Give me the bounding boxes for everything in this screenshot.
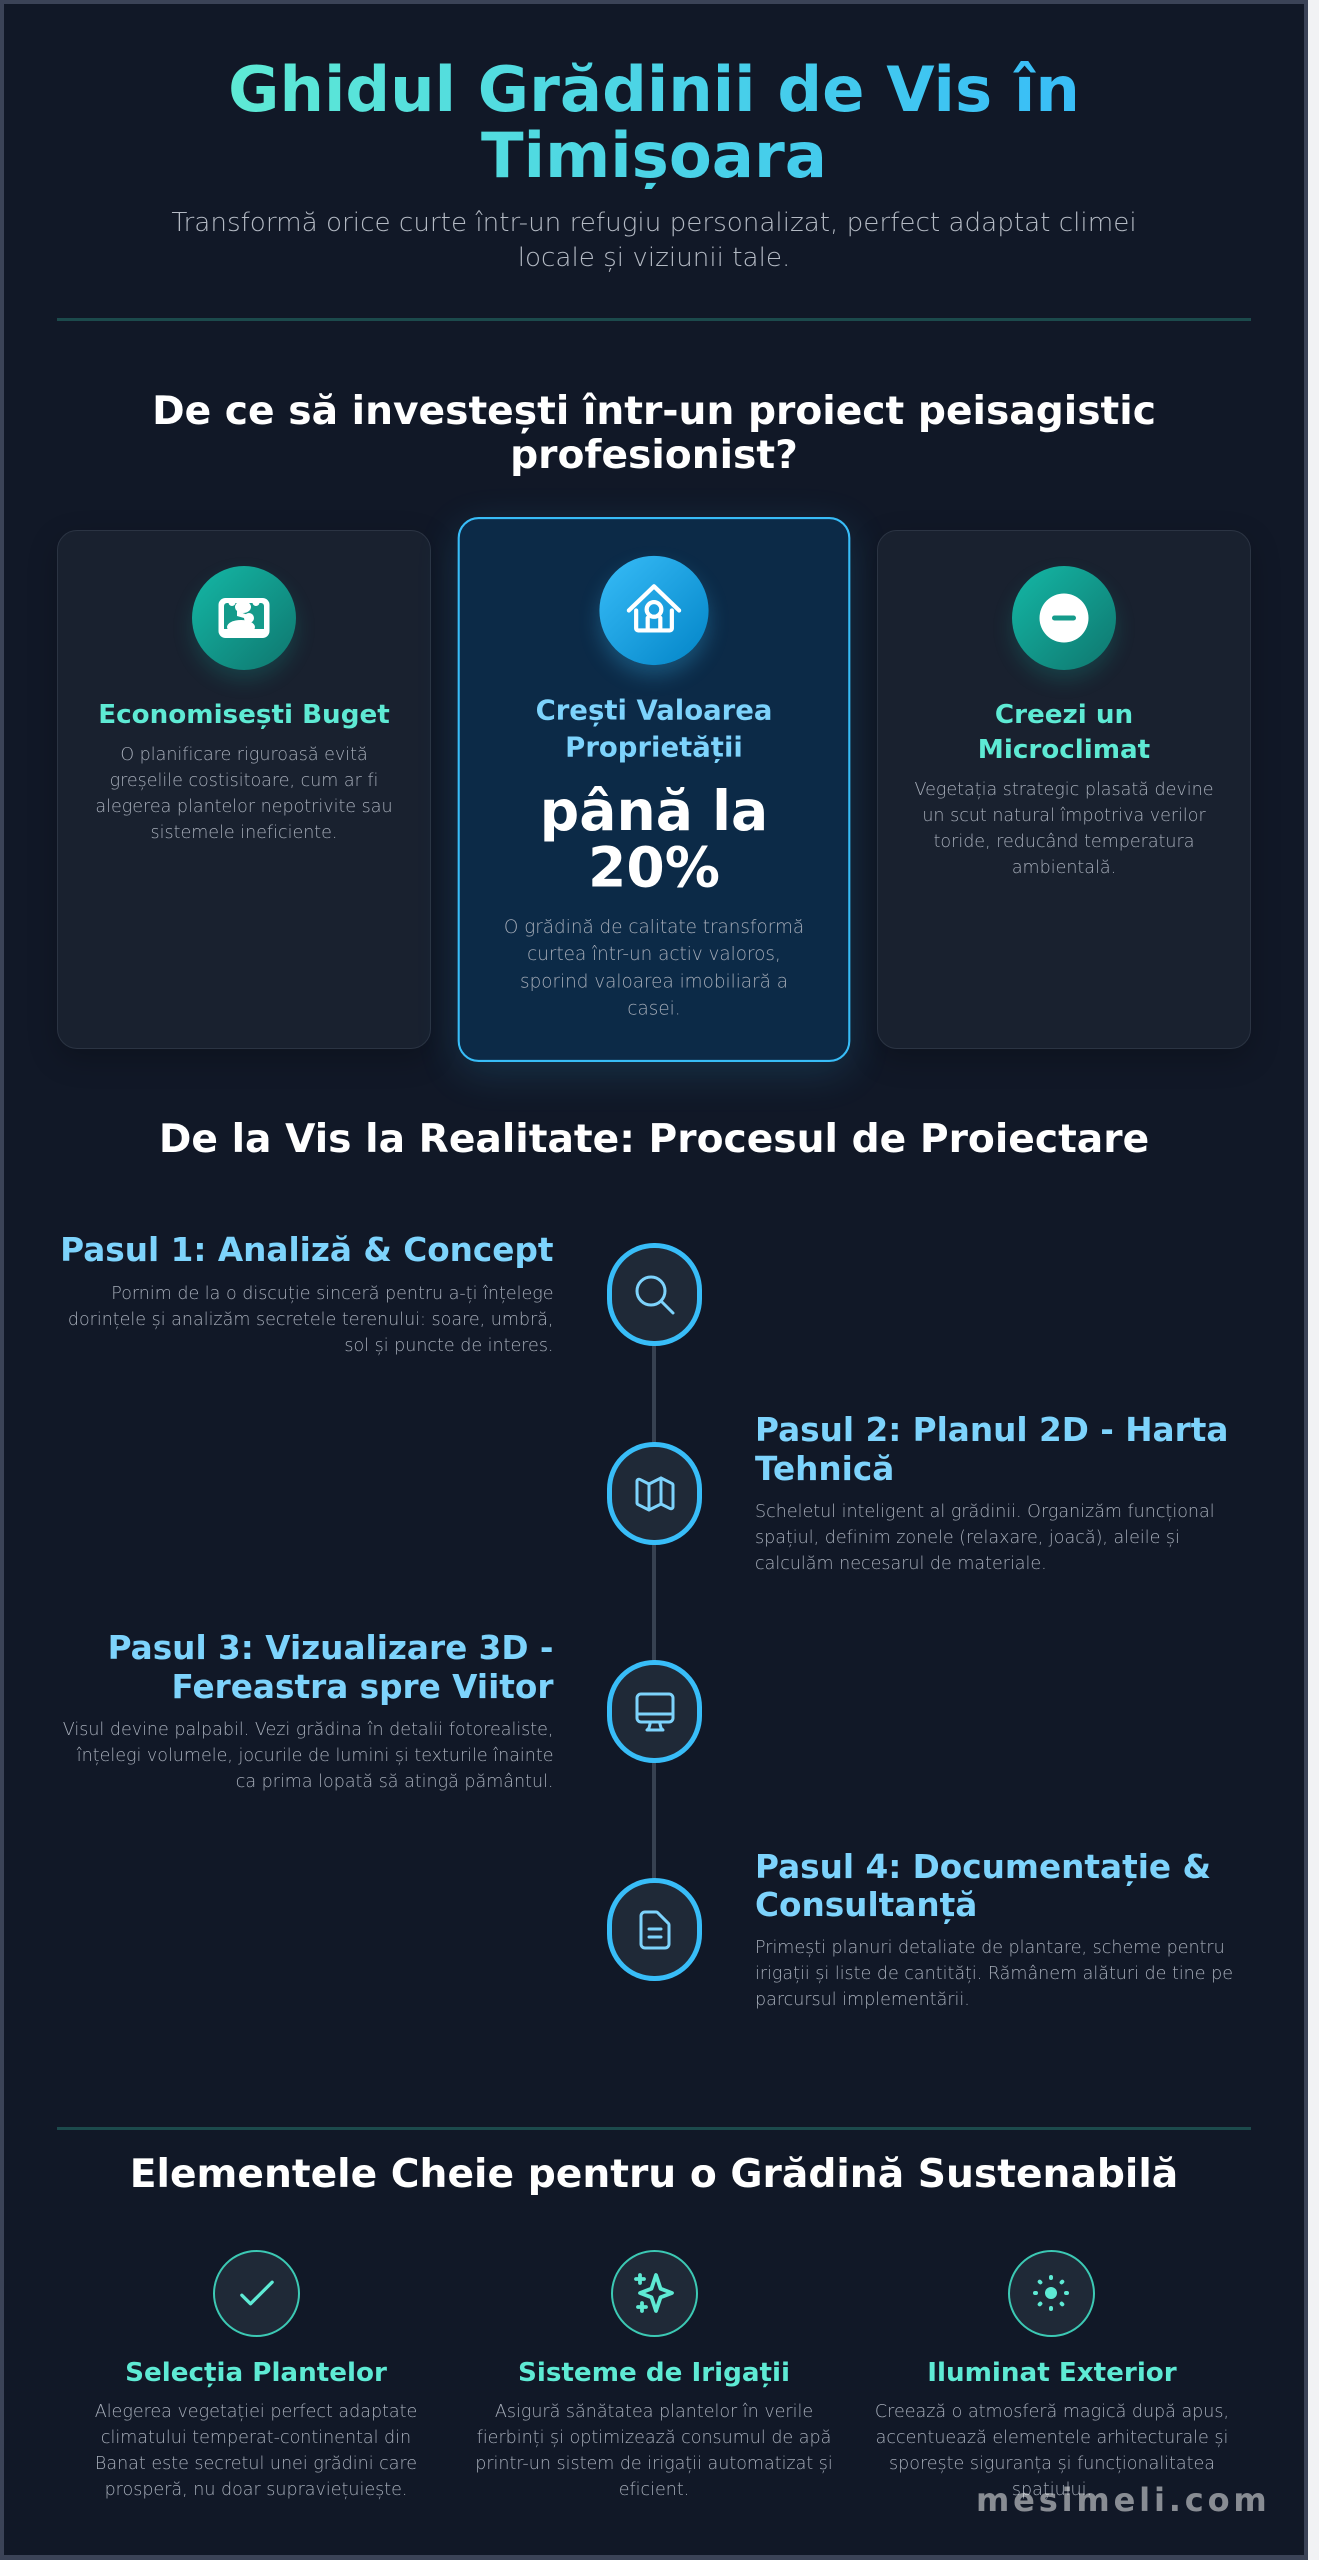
column text: spațiului. — [1012, 2480, 1092, 2500]
card title — [536, 696, 772, 764]
column text: accentuează elementele arhitecturale și — [876, 2428, 1228, 2448]
card text: Vegetația strategic plasată devine — [915, 780, 1213, 800]
column text: Alegerea vegetației perfect adaptate — [95, 2402, 417, 2422]
title — [221, 57, 1087, 189]
column text: fierbinți și optimizează consumul de apă — [477, 2428, 831, 2448]
column text: Asigură sănătatea plantelor în verile — [495, 2402, 813, 2422]
card title: Proprietății — [565, 733, 743, 764]
card text: curtea într-un activ valoros, — [527, 944, 781, 965]
column text — [875, 2402, 1229, 2500]
card title: Microclimat — [978, 735, 1150, 765]
step 3 title — [108, 1629, 554, 1706]
step 1 text — [68, 1284, 554, 1356]
card text — [95, 745, 393, 843]
card text: ambientală. — [1012, 858, 1116, 878]
step 3 text: înțelegi volumele, jocurile de lumini și texturile înainte — [77, 1746, 554, 1766]
step 4 text: parcursul implementării. — [755, 1990, 970, 2010]
column text: sporește siguranța și funcționalitatea — [889, 2454, 1215, 2474]
card text: alegerea plantelor nepotrivite sau — [95, 797, 393, 817]
title: Ghidul Grădinii de Vis în — [228, 53, 1080, 126]
card title: Crești Valoarea — [536, 696, 772, 727]
panel: microclimate — [877, 530, 1251, 1049]
step 2 text: spațiul, definim zonele (relaxare, joacă), aleile și — [755, 1528, 1180, 1548]
step 2 title: Pasul 2: Planul 2D - Harta — [755, 1411, 1228, 1449]
step 4 text — [755, 1938, 1233, 2010]
step 2 text — [755, 1502, 1215, 1574]
column title: Selecția Plantelor — [125, 2358, 387, 2388]
heading: why invest: profesionist? — [510, 433, 798, 478]
step 3 title: Pasul 3: Vizualizare 3D - — [108, 1629, 554, 1667]
statistic: până la — [540, 780, 768, 844]
column text: Creează o atmosferă magică după apus, — [875, 2402, 1229, 2422]
step 3 icon: monitor — [607, 1660, 702, 1763]
subtitle: locale și viziunii tale. — [518, 243, 790, 273]
heading: why invest: De ce să investești într-un proiect peisagistic — [152, 389, 1156, 434]
step 1 icon: search — [607, 1243, 702, 1346]
watermark: mesimeli.com — [976, 2480, 1271, 2518]
column text — [95, 2402, 417, 2500]
step 2 text: calculăm necesarul de materiale. — [755, 1554, 1047, 1574]
card text: sistemele ineficiente. — [150, 823, 338, 843]
column text: printr-un sistem de irigații automatizat și — [475, 2454, 833, 2474]
step 2 text: Scheletul inteligent al grădinii. Organizăm funcțional — [755, 1502, 1215, 1522]
panel: save budget — [57, 530, 431, 1049]
timeline line — [652, 1344, 656, 1884]
step 4 icon: document — [607, 1878, 702, 1981]
step 2 icon: map — [607, 1442, 702, 1545]
subtitle: Transformă orice curte într-un refugiu personalizat, perfect adaptat climei — [171, 208, 1137, 238]
card text — [504, 917, 804, 1020]
card text: casei. — [627, 999, 681, 1020]
statistic — [540, 780, 768, 900]
icon: sparkles — [610, 2250, 698, 2337]
column title: Sisteme de Irigații — [518, 2358, 790, 2388]
card text: O grădină de calitate transformă — [504, 917, 804, 938]
heading: why invest — [152, 389, 1156, 478]
card text: sporind valoarea imobiliară a — [520, 971, 788, 992]
card title — [978, 700, 1150, 765]
column text: prosperă, nu doar supraviețuiește. — [105, 2480, 407, 2500]
subtitle — [171, 208, 1137, 273]
icon: check — [213, 2250, 300, 2337]
step 3 text — [63, 1720, 554, 1792]
step 1 title: Pasul 1: Analiză & Concept — [60, 1231, 554, 1269]
step 1 text: dorințele și analizăm secretele terenului: soare, umbră, — [68, 1310, 554, 1330]
icon: money — [192, 566, 296, 670]
card text: O planificare riguroasă evită — [120, 745, 368, 765]
step 3 text: Visul devine palpabil. Vezi grădina în detalii fotorealiste, — [63, 1720, 554, 1740]
heading: key elements: Elementele Cheie pentru o Grădină Sustenabilă — [130, 2152, 1178, 2197]
column text: climatului temperat-continental din — [101, 2428, 411, 2448]
column title: Iluminat Exterior — [927, 2358, 1177, 2388]
step 1 text: Pornim de la o discuție sinceră pentru a-ți înțelege — [111, 1284, 554, 1304]
step 1 text: sol și puncte de interes. — [344, 1336, 554, 1356]
step 4 title: Pasul 4: Documentație & — [755, 1848, 1211, 1886]
step 3 title: Fereastra spre Viitor — [171, 1668, 554, 1706]
step 2 title: Tehnică — [755, 1450, 894, 1488]
icon: minus circle — [1012, 566, 1116, 670]
icon: sun — [1008, 2250, 1095, 2337]
column text: eficient. — [619, 2480, 689, 2500]
heading: process: De la Vis la Realitate: Procesul de Proiectare — [159, 1117, 1149, 1162]
card title: Economisești Buget — [98, 700, 390, 730]
icon: house — [599, 556, 709, 665]
step 4 text: Primești planuri detaliate de plantare, scheme pentru — [755, 1938, 1225, 1958]
step 3 text: ca prima lopată să atingă pământul. — [236, 1772, 554, 1792]
step 4 title — [755, 1848, 1211, 1924]
card text — [915, 780, 1213, 878]
card title: Creezi un — [995, 700, 1133, 730]
statistic: 20% — [588, 836, 720, 900]
card text: toride, reducând temperatura — [934, 832, 1194, 852]
card text: greșelile costisitoare, cum ar fi — [110, 771, 378, 791]
card text: un scut natural împotriva verilor — [922, 806, 1206, 826]
column text: Banat este secretul unei grădini care — [95, 2454, 417, 2474]
step 2 title — [755, 1411, 1228, 1488]
panel: property value — [458, 517, 850, 1062]
step 4 text: irigații și liste de cantități. Rămânem alături de tine pe — [755, 1964, 1233, 1984]
title: Timișoara — [481, 119, 827, 192]
column text — [475, 2402, 833, 2500]
step 4 title: Consultanță — [755, 1886, 977, 1924]
